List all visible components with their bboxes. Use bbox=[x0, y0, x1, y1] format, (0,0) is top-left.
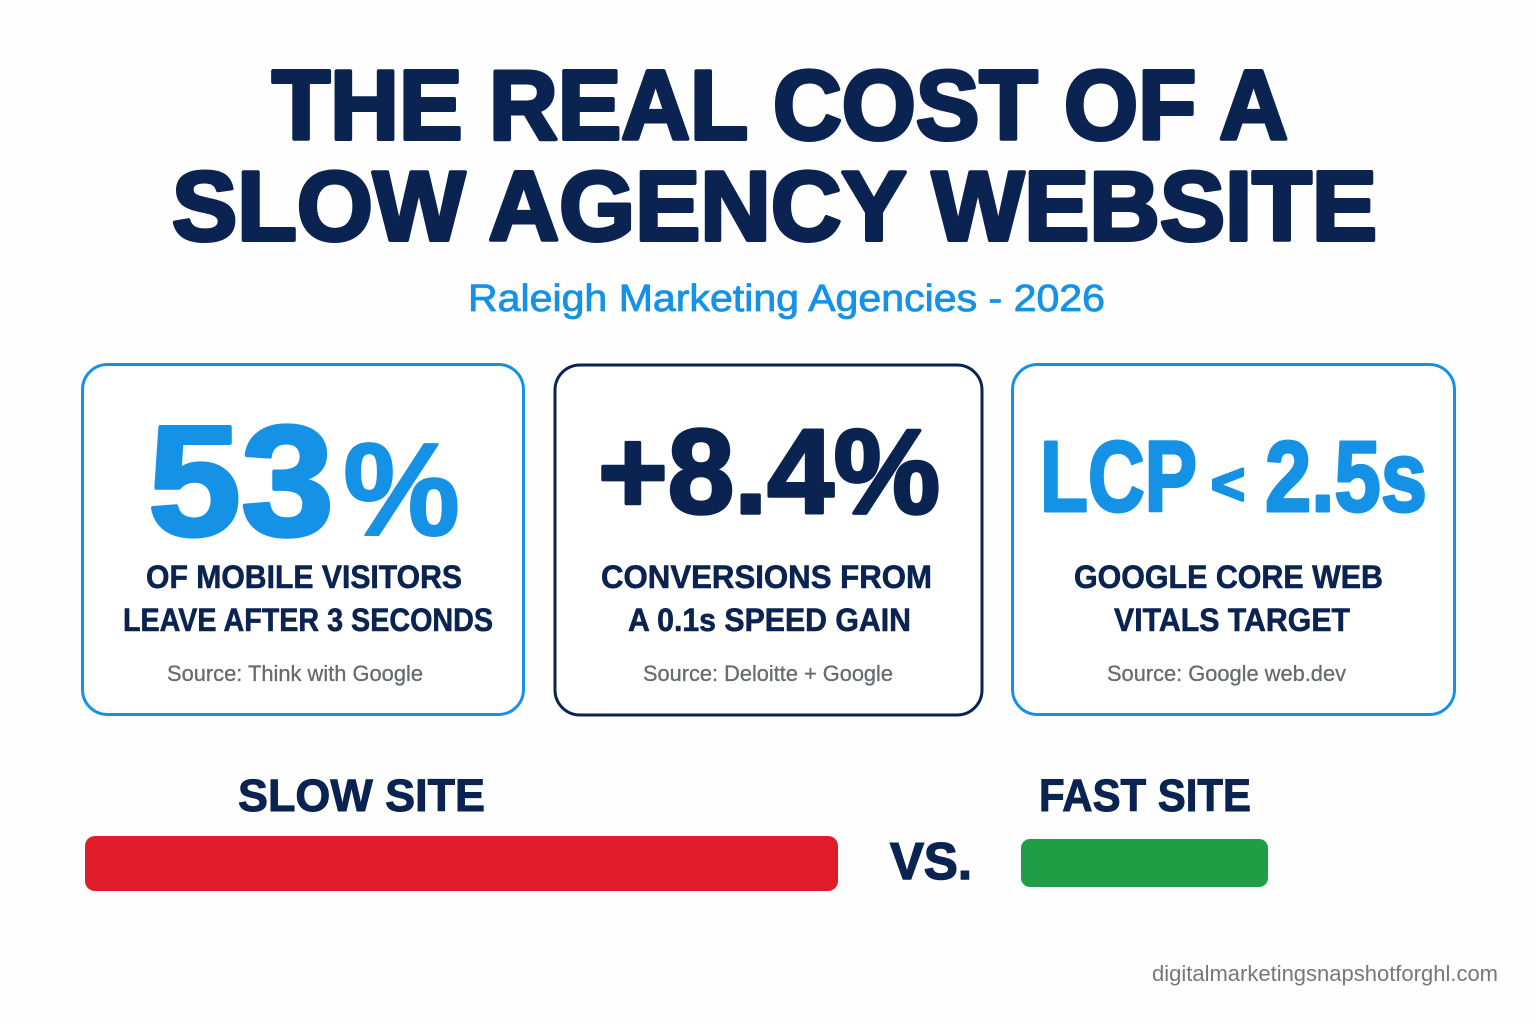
label: conversions: CONVERSIONS FROM bbox=[601, 559, 932, 595]
title bbox=[172, 50, 1377, 261]
label: mobile visitors bbox=[123, 559, 493, 638]
stat: LCP < 2.5s bbox=[1040, 421, 1427, 533]
stat: LCP < 2.5s: LCP bbox=[1040, 421, 1197, 533]
label: conversions: A 0.1s SPEED GAIN bbox=[628, 602, 911, 638]
stat: 53% bbox=[148, 394, 460, 569]
label: core web vitals: GOOGLE CORE WEB bbox=[1074, 559, 1383, 595]
vs label: VS. bbox=[890, 833, 972, 891]
stat: 53%: 53 bbox=[148, 394, 334, 569]
footer url: digitalmarketingsnapshotforghl.com bbox=[1152, 961, 1498, 986]
label: core web vitals: VITALS TARGET bbox=[1114, 602, 1350, 638]
panel: mobile visitors bbox=[82, 364, 524, 714]
panel: core web vitals bbox=[1012, 364, 1454, 714]
subtitle: Raleigh Marketing Agencies - 2026 bbox=[468, 278, 1105, 320]
bar: fast site bbox=[1021, 839, 1268, 887]
stat: LCP < 2.5s: < bbox=[1211, 452, 1245, 517]
title: SLOW AGENCY WEBSITE bbox=[172, 151, 1377, 261]
panel: conversions bbox=[555, 365, 982, 715]
label: mobile visitors: LEAVE AFTER 3 SECONDS bbox=[123, 602, 493, 638]
bar: slow site bbox=[85, 836, 838, 891]
heading: slow site: SLOW SITE bbox=[238, 770, 485, 821]
label: mobile visitors: OF MOBILE VISITORS bbox=[146, 559, 462, 595]
source: Google web.dev: Source: Google web.dev bbox=[1107, 661, 1346, 686]
stat: 53%: % bbox=[343, 416, 460, 563]
source: Deloitte + Google: Source: Deloitte + Google bbox=[643, 661, 893, 686]
source: Think with Google: Source: Think with Google bbox=[167, 661, 423, 686]
heading: fast site: FAST SITE bbox=[1039, 770, 1251, 821]
stat: LCP < 2.5s: 2.5s bbox=[1265, 421, 1427, 533]
title: THE REAL COST OF A bbox=[272, 50, 1288, 160]
label: conversions bbox=[601, 559, 932, 638]
stat: +8.4%: +8.4% bbox=[598, 405, 940, 539]
label: core web vitals bbox=[1074, 559, 1383, 638]
